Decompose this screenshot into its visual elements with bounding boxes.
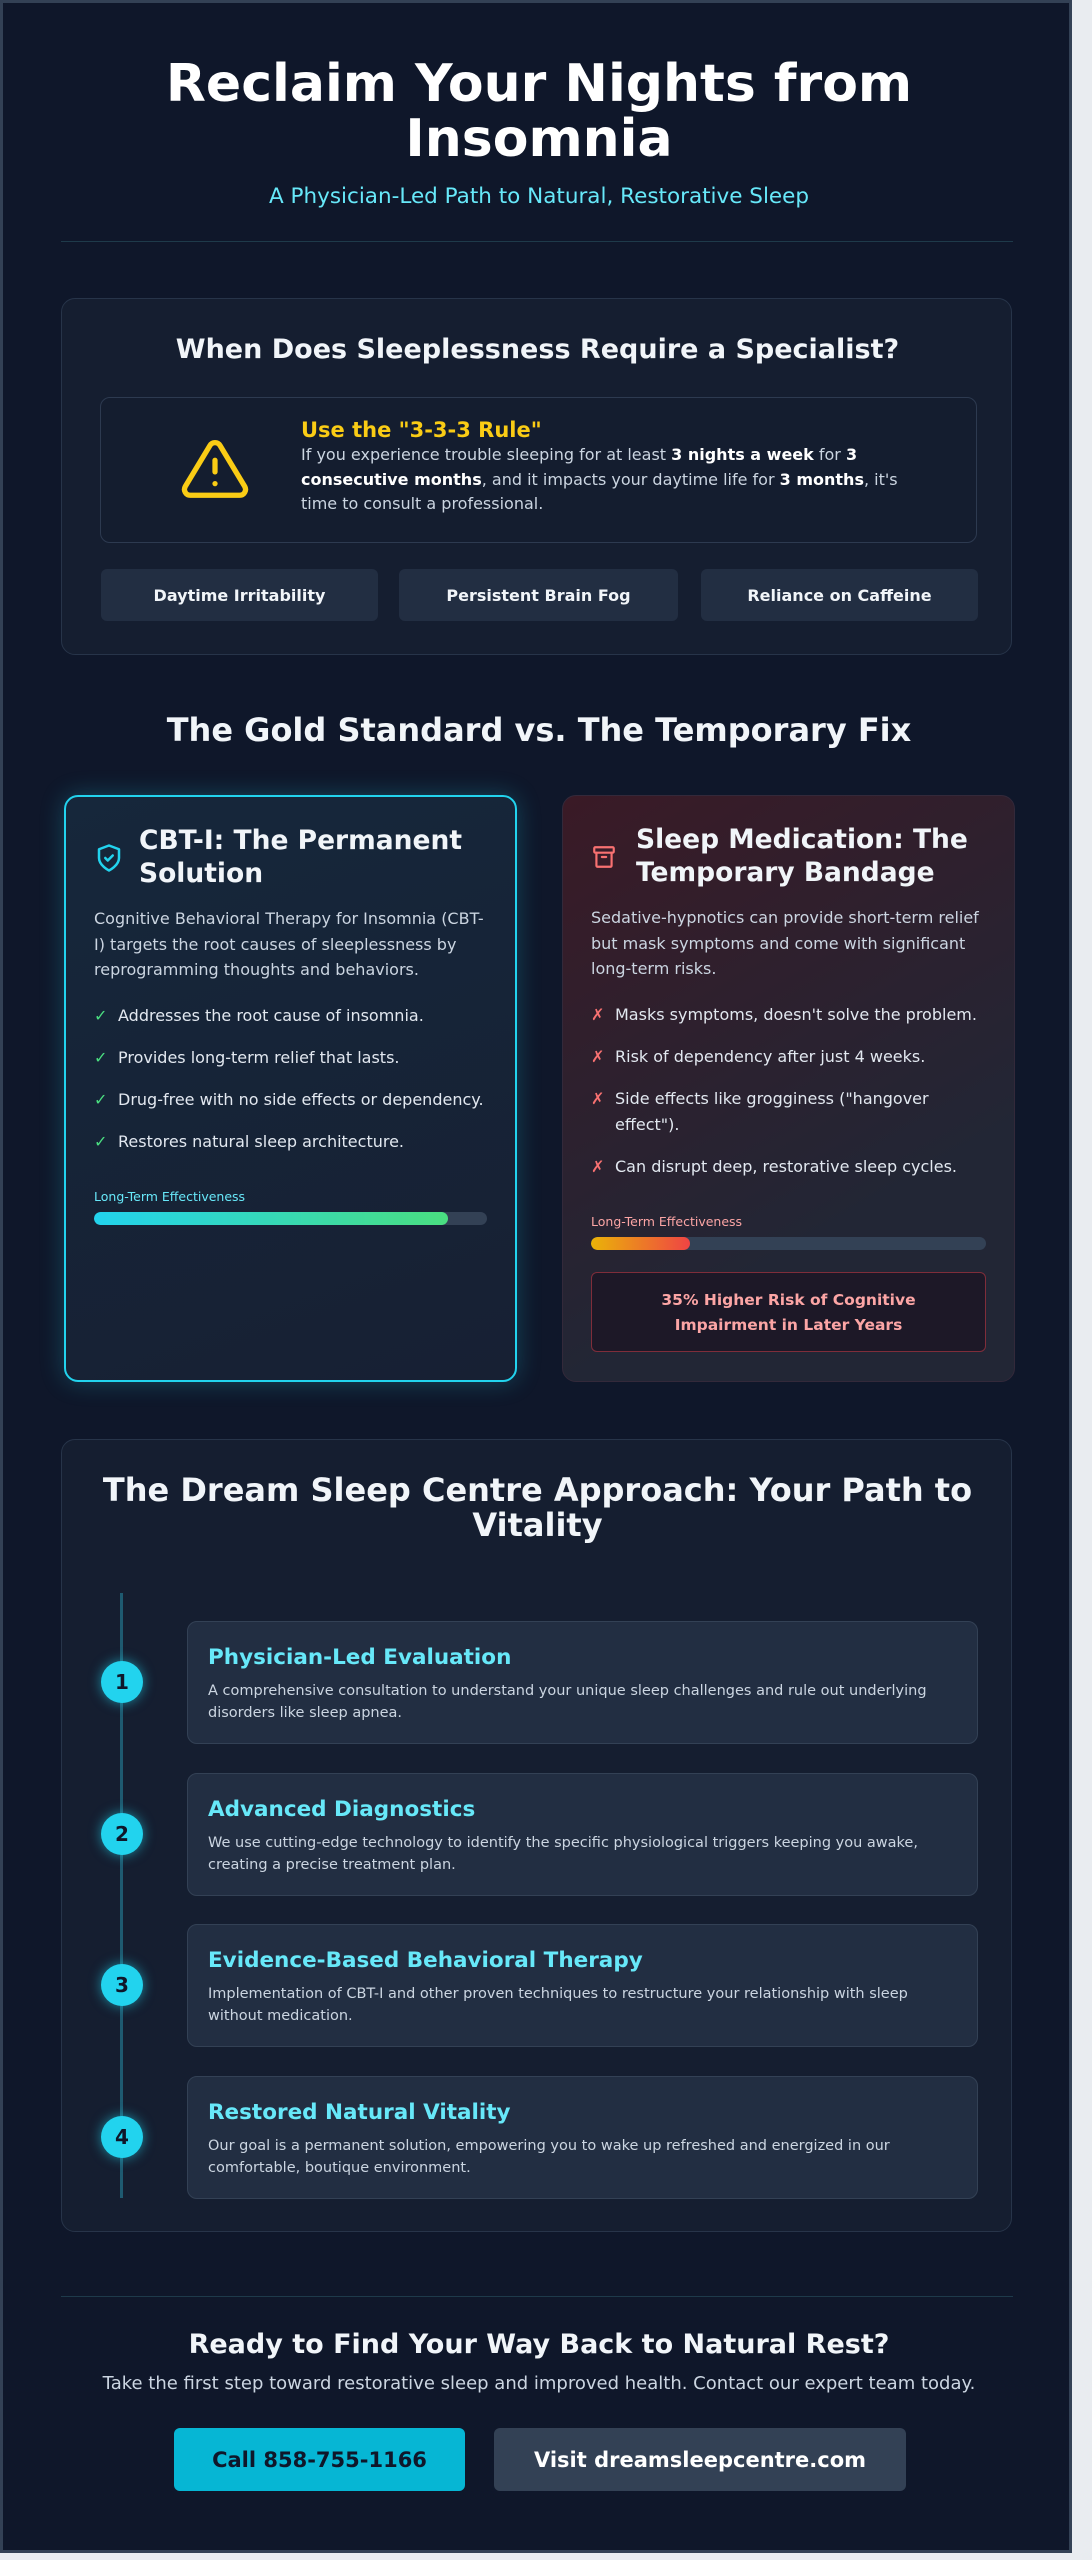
step 4 number: 4 (115, 2125, 129, 2149)
rule text: Use the "3-3-3 Rule" (301, 418, 542, 442)
step 4: Restored Natural Vitality (208, 2100, 511, 2125)
effectiveness bar: Long-Term Effectiveness (591, 1214, 742, 1228)
benefits list: ✓ (94, 1090, 107, 1108)
risks list: ✗ (591, 1046, 604, 1066)
risks list: Side effects like grogginess ("hangover effect"). (615, 1088, 929, 1134)
risks list: ✗ (591, 1004, 604, 1024)
button: website (494, 2428, 906, 2491)
step 2 (187, 1773, 978, 1896)
button: call (174, 2428, 465, 2491)
benefits list: Restores natural sleep architecture. (118, 1132, 404, 1150)
step 1: A comprehensive consultation to understand your unique sleep challenges and rule out underlying disorders like sleep apnea. (208, 1683, 927, 1721)
icon: pill bottle (593, 846, 615, 868)
rule text: If you experience trouble sleeping for at least 3 nights a week for 3 consecutive months, and it impacts your daytime life for 3 months, it's time to consult a professional. (301, 445, 898, 513)
button: website: Visit dreamsleepcentre.com (534, 2448, 866, 2472)
approach heading: The Dream Sleep Centre Approach: Your Path to (103, 1471, 972, 1509)
benefits list: Provides long-term relief that lasts. (118, 1048, 400, 1066)
benefits list: ✓ (94, 1006, 107, 1024)
panel: approach (61, 1439, 1012, 2232)
benefits list: Drug-free with no side effects or dependency. (118, 1090, 484, 1108)
CTA subtext: Take the first step toward restorative sleep and improved health. Contact our expert team today. (103, 2373, 975, 2394)
icon: shield (98, 844, 120, 872)
title: Reclaim Your Nights from (166, 54, 912, 114)
section heading: comparison: The Gold Standard vs. The Temporary Fix (167, 711, 911, 749)
step 3 number (101, 1964, 143, 2006)
effectiveness bar (94, 1188, 487, 1225)
step 2 number: 2 (115, 1822, 129, 1846)
rule box (100, 397, 977, 543)
step 4 number (101, 2116, 143, 2158)
risks list (591, 1004, 977, 1176)
tag: irritability (101, 569, 378, 621)
card title: Sleep Medication: The Temporary Bandage (636, 824, 968, 888)
effectiveness bar: Long-Term Effectiveness (94, 1188, 245, 1204)
description: Cognitive Behavioral Therapy for Insomnia (CBT-I) targets the root causes of sleeplessness by reprogramming thoughts and behaviors. (94, 909, 484, 979)
effectiveness bar (591, 1214, 986, 1250)
step 3: Evidence-Based Behavioral Therapy (208, 1948, 643, 1973)
step 1: Physician-Led Evaluation (208, 1645, 511, 1670)
button: call: Call 858-755-1166 (212, 2448, 427, 2472)
title (166, 54, 912, 169)
callout: cognitive risk: Impairment in Later Years (675, 1316, 902, 1334)
tag: caffeine (701, 569, 978, 621)
callout: cognitive risk (591, 1272, 986, 1352)
approach heading (103, 1471, 972, 1544)
step 2 number (101, 1813, 143, 1855)
risks list: ✗ (591, 1088, 604, 1108)
CTA heading: Ready to Find Your Way Back to Natural Rest? (189, 2329, 889, 2360)
panel: CBT-I card (64, 795, 517, 1382)
step 3: Implementation of CBT-I and other proven techniques to restructure your relationship with sleep without medication. (208, 1986, 908, 2024)
benefits list: ✓ (94, 1048, 107, 1066)
step 1 number (101, 1661, 143, 1703)
step 2: Advanced Diagnostics (208, 1797, 475, 1822)
tag: irritability: Daytime Irritability (154, 586, 325, 604)
step 4: Our goal is a permanent solution, empowering you to wake up refreshed and energized in our comfortable, boutique environment. (208, 2138, 890, 2176)
step 2: We use cutting-edge technology to identify the specific physiological triggers keeping you awake, creating a precise treatment plan. (208, 1835, 918, 1873)
approach heading: Vitality (472, 1506, 603, 1544)
benefits list (94, 1006, 484, 1150)
tag: caffeine: Reliance on Caffeine (747, 586, 932, 604)
risks list: Risk of dependency after just 4 weeks. (615, 1046, 925, 1066)
tag: brain fog: Persistent Brain Fog (446, 586, 631, 604)
callout: cognitive risk: 35% Higher Risk of Cognitive (661, 1290, 916, 1308)
step 1 number: 1 (115, 1670, 129, 1694)
risks list: ✗ (591, 1156, 604, 1176)
step 1 (187, 1621, 978, 1744)
risks list: Masks symptoms, doesn't solve the problem. (615, 1004, 977, 1024)
card title: CBT-I: The Permanent Solution (139, 825, 462, 889)
subtitle: A Physician-Led Path to Natural, Restorative Sleep (269, 184, 809, 209)
panel: medication card (562, 795, 1015, 1382)
benefits list: Addresses the root cause of insomnia. (118, 1006, 424, 1024)
panel: specialist criteria (61, 298, 1012, 655)
benefits list: ✓ (94, 1132, 107, 1150)
tag: brain fog (399, 569, 678, 621)
step 3 (187, 1924, 978, 2047)
step 4 (187, 2076, 978, 2199)
panel heading: When Does Sleeplessness Require a Specialist? (176, 334, 899, 365)
description: Sedative-hypnotics can provide short-term relief but mask symptoms and come with significant long-term risks. (591, 908, 979, 978)
risks list: Can disrupt deep, restorative sleep cycles. (615, 1156, 957, 1176)
step 3 number: 3 (115, 1973, 129, 1997)
title: Insomnia (405, 109, 673, 169)
icon: warning (182, 440, 248, 498)
